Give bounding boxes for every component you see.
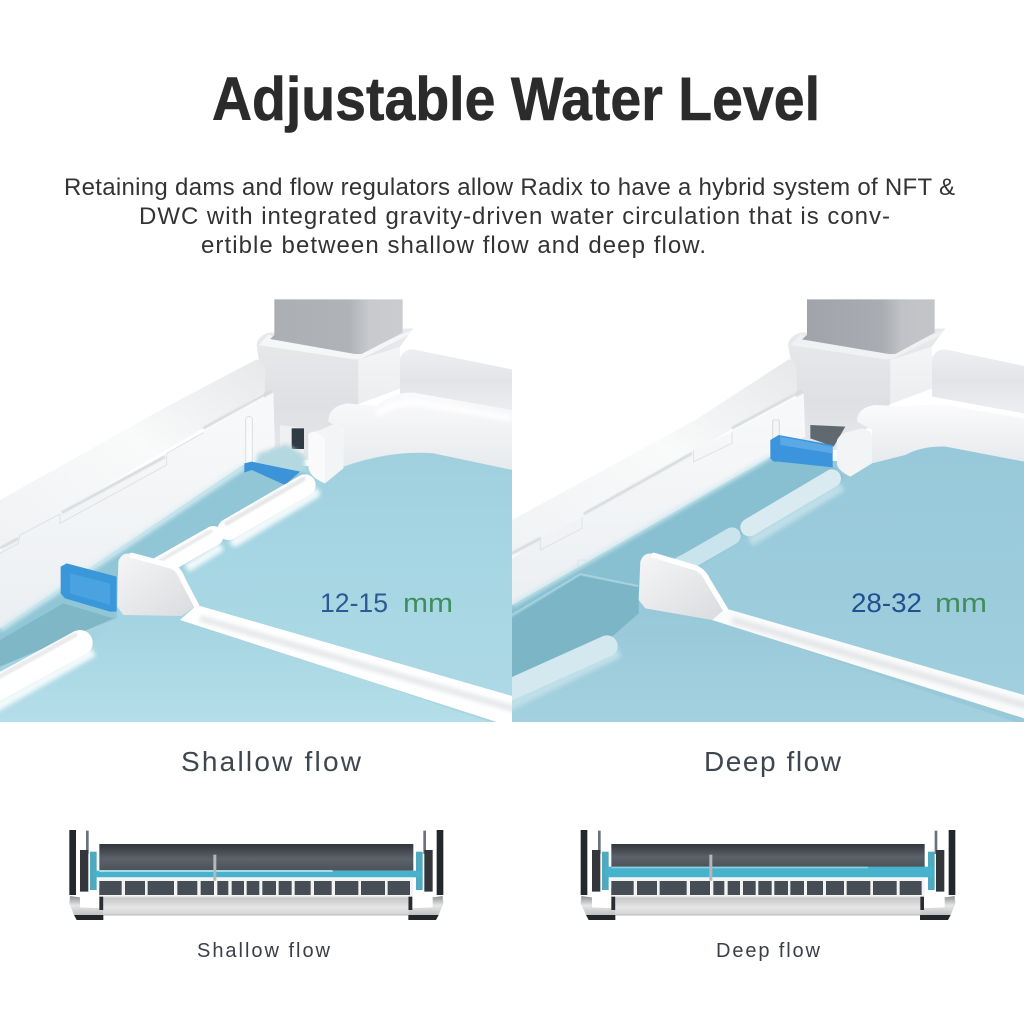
- blue flap small: [244, 462, 300, 485]
- cross section: shallow flow: [69, 830, 443, 920]
- long dam bar with tab: [117, 554, 520, 722]
- opening: [280, 425, 304, 453]
- label: 28-32 mm: [851, 588, 987, 618]
- main water: [418, 452, 512, 696]
- inner wall face: [512, 391, 805, 605]
- water band: [93, 871, 422, 877]
- blue flap large: [61, 563, 117, 612]
- left bracket: [69, 830, 103, 920]
- label: 28-32 mm: 28-32: [851, 588, 922, 618]
- center post: [709, 855, 712, 881]
- blue flap: [770, 435, 833, 467]
- title: Adjustable Water Level: [212, 65, 820, 133]
- lip of right wall: [328, 393, 512, 472]
- water band: [605, 867, 934, 877]
- right back wall: [400, 349, 512, 413]
- water channel: [0, 465, 306, 640]
- grille: [99, 877, 413, 897]
- intro paragraph: DWC with integrated gravity-driven water circulation that is conv-: [139, 203, 890, 230]
- base bar: [615, 895, 920, 915]
- back panel: [611, 844, 925, 867]
- collar: [257, 328, 413, 460]
- base water: [512, 447, 1024, 722]
- base water: [0, 453, 512, 722]
- lip of right wall: [857, 404, 1024, 463]
- left bracket: [581, 830, 615, 920]
- right back wall: [932, 349, 1024, 413]
- lower water: [0, 671, 489, 722]
- panel: deep flow render: [505, 299, 1024, 722]
- outer wall: [512, 359, 797, 557]
- column: [270, 299, 403, 354]
- center post: [213, 855, 216, 881]
- right bracket: [408, 830, 443, 920]
- opening: [810, 425, 845, 447]
- lower water: [512, 687, 1014, 722]
- water channel: [512, 458, 844, 618]
- caption: deep flow: Deep flow: [704, 746, 842, 777]
- base bar: [103, 895, 408, 915]
- back panel: [99, 844, 413, 871]
- label: 12-15 mm: [320, 588, 453, 618]
- post: [837, 428, 872, 477]
- grille: [611, 877, 925, 897]
- outer wall: [0, 359, 265, 548]
- right bracket: [920, 830, 955, 920]
- dam segments: [0, 479, 315, 708]
- label: 12-15 mm: 12-15: [320, 588, 388, 618]
- small caption: shallow flow: Shallow flow: [197, 940, 331, 962]
- caption: shallow flow: Shallow flow: [181, 746, 362, 777]
- intro paragraph: ertible between shallow flow and deep flow.: [201, 232, 706, 259]
- main water: [872, 446, 1024, 464]
- dam segments: [505, 478, 842, 707]
- panel: shallow flow render: [0, 299, 520, 722]
- intro paragraph: [64, 174, 955, 259]
- column: [802, 299, 935, 354]
- small caption: deep flow: Deep flow: [716, 940, 821, 962]
- label: 12-15 mm: mm: [403, 588, 453, 618]
- post: [308, 424, 343, 483]
- label: 28-32 mm: mm: [935, 588, 987, 618]
- inner wall face: [0, 391, 275, 628]
- collar: [788, 328, 945, 450]
- long dam bar with tab: [639, 554, 1024, 718]
- intro paragraph: Retaining dams and flow regulators allow Radix to have a hybrid system of NFT &: [64, 174, 955, 201]
- cross section: deep flow: [581, 830, 955, 920]
